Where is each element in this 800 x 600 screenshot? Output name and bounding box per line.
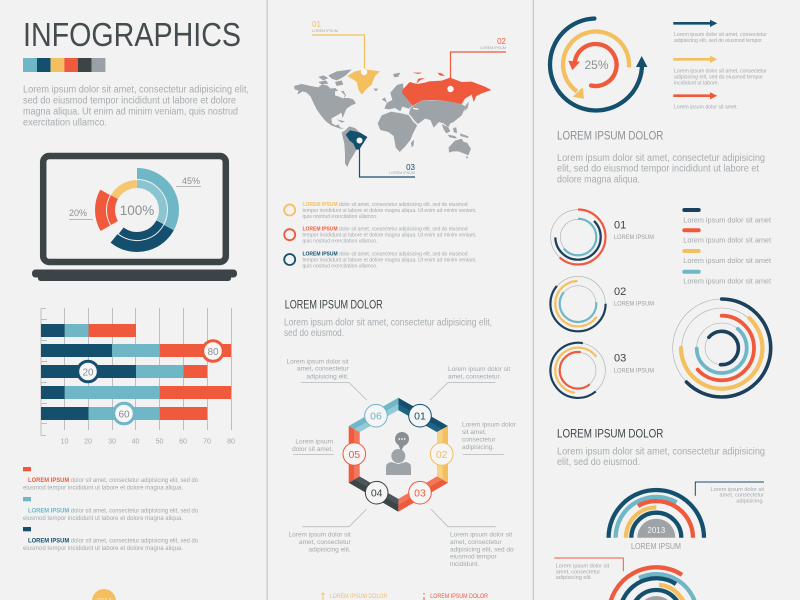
bar row 1 xyxy=(41,324,136,337)
red arrow xyxy=(568,44,617,86)
western hemisphere land xyxy=(294,69,378,167)
marker and callout 02: LOREM IPSUM xyxy=(480,46,506,50)
legend item navy: eiusmod tempor incididunt ut labore et dolore magna aliqua. xyxy=(23,545,183,552)
cut-off yellow year badge xyxy=(92,589,116,600)
colour legend: Lorem ipsum dolor sit amet xyxy=(683,236,771,245)
callout navy: adipisicing. xyxy=(736,499,764,505)
donut labels: 20% xyxy=(69,208,87,218)
callout red: amet, consectetur xyxy=(556,569,600,575)
node 05: 05 xyxy=(348,449,360,461)
Brazil highlighted xyxy=(346,130,367,149)
colour legend xyxy=(682,208,771,286)
callout 06: Lorem ipsum dolor sit xyxy=(287,358,349,365)
callout 04: amet, consectetur xyxy=(299,539,352,546)
colour palette swatches xyxy=(23,58,105,72)
navy arrow xyxy=(550,18,648,110)
callout 04: Lorem ipsum dolor sit xyxy=(289,531,351,538)
footer label red: LOREM IPSUM DOLOR xyxy=(430,594,489,600)
legend item red xyxy=(23,467,198,492)
legend item blue xyxy=(23,497,198,522)
bar row 2 xyxy=(41,344,231,357)
legend item navy: LOREM IPSUM dolor sit amet, consectetur adipisicing elit, sed do xyxy=(28,538,198,545)
axes and gridlines xyxy=(41,308,232,436)
callout red: adipisicing elit. xyxy=(556,575,593,581)
callout 03 xyxy=(431,509,514,568)
Greenland highlighted xyxy=(347,69,380,95)
intro text block xyxy=(23,84,249,128)
node 04: 04 xyxy=(371,488,383,500)
callout 05: Lorem ipsum xyxy=(295,438,333,445)
value marker 80: 80 xyxy=(207,347,219,358)
middle section text: sed do eiusmod. xyxy=(284,328,344,339)
callout navy: Lorem ipsum dolor sit xyxy=(711,487,764,493)
x axis labels: 20 xyxy=(84,438,92,446)
donut labels: 45% xyxy=(182,176,200,186)
bar row 4 xyxy=(41,386,231,399)
colour legend: Lorem ipsum dolor sit amet xyxy=(683,277,771,286)
hexagon cycle diagram xyxy=(287,358,517,568)
ring label 02: 02 xyxy=(614,286,626,298)
marker and callout 02: 02 xyxy=(497,37,507,46)
list item navy: quis nostrud exercitation ullamco. xyxy=(302,263,378,269)
list item navy: LOREM IPSUM dolor sit amet, consectetur adipisicing elit, sed do eiusmod xyxy=(302,251,468,257)
arrow yellow: adipisicing elit, sed do eiusmod tempor xyxy=(674,74,763,80)
callout 05 xyxy=(292,438,334,454)
hexagon ribbon segments xyxy=(349,398,448,512)
footer label yellow: LOREM IPSUM DOLOR xyxy=(330,594,388,600)
callout 01 xyxy=(430,366,510,400)
x axis labels: 70 xyxy=(203,438,211,446)
ring label 03: LOREM IPSUM xyxy=(614,367,654,374)
node 06: 06 xyxy=(370,410,382,422)
semicircle chart 2013 xyxy=(609,490,704,551)
callout 03: amet, consectetur xyxy=(450,539,502,546)
node 01: 01 xyxy=(414,410,426,422)
marker and callout 01 xyxy=(312,20,367,75)
intro text block: exercitation ullamco. xyxy=(23,118,107,128)
callout 04 xyxy=(289,509,367,553)
x axis labels xyxy=(61,438,235,446)
callout 01: amet, consectetur. xyxy=(448,373,501,380)
legend item blue: LOREM IPSUM dolor sit amet, consectetur adipisicing elit, sed do xyxy=(28,508,198,514)
right top section text: dolore magna aliqua. xyxy=(557,174,640,186)
callout 03: adipisicing elit, sed do xyxy=(450,546,514,553)
x axis labels: 60 xyxy=(179,438,187,446)
callout 05: dolor sit amet. xyxy=(292,446,333,453)
ring label 02 xyxy=(614,286,654,308)
callout 06: adipisicing elit. xyxy=(306,373,349,380)
title: INFOGRAPHICS xyxy=(23,16,241,53)
callout 02: sit amet, xyxy=(462,429,487,436)
arrow navy: adipisicing elit, sed do eiusmod tempor. xyxy=(674,38,763,44)
list item yellow: quis nostrud exercitation ullamco. xyxy=(302,214,378,220)
right top section text xyxy=(557,153,765,186)
marker and callout 03: LOREM IPSUM xyxy=(389,171,415,175)
icon: person with speech bubble xyxy=(386,432,411,475)
arrow navy xyxy=(673,20,767,44)
list item red: tempor incididunt ut labore et dolore magna aliqua. Ut enim ad minim veniam, xyxy=(302,233,477,239)
callout 06 xyxy=(287,358,367,400)
marker and callout 03 xyxy=(355,136,416,177)
callout red: Lorem ipsum dolor sit xyxy=(556,563,610,569)
heading: right top section: LOREM IPSUM DOLOR xyxy=(557,128,664,142)
middle section text xyxy=(284,318,492,339)
node 04 xyxy=(365,481,388,504)
laptop with donut chart xyxy=(32,156,237,281)
marker and callout 01: LOREM IPSUM xyxy=(312,29,338,33)
list item red xyxy=(284,227,477,245)
ring label 01: 01 xyxy=(614,220,626,232)
ring label 01: LOREM IPSUM xyxy=(614,234,654,241)
semicircle chart cut off xyxy=(609,567,697,600)
value marker 80 xyxy=(203,341,223,361)
right bottom section text xyxy=(557,446,765,468)
callout navy xyxy=(695,482,764,505)
Russia highlighted xyxy=(402,73,491,106)
legend item red: eiusmod tempor incididunt ut labore et dolore magna aliqua. xyxy=(23,484,183,492)
callout 02: adipisicing. xyxy=(462,444,494,451)
list item navy: tempor incididunt ut labore et dolore magna aliqua. Ut enim ad minim veniam, xyxy=(302,257,477,263)
callout 02: Lorem ipsum dolor xyxy=(462,422,517,429)
marker and callout 03: 03 xyxy=(406,163,416,172)
node 03: 03 xyxy=(414,488,426,500)
colour legend: Lorem ipsum dolor sit amet xyxy=(683,215,771,224)
node 02 xyxy=(430,443,453,465)
legend item navy xyxy=(23,527,198,552)
semicircle chart 2013: 2013 xyxy=(647,526,666,535)
legend item red: LOREM IPSUM dolor sit amet, consectetur adipisicing elit, sed do xyxy=(28,477,198,484)
intro text block: Lorem ipsum dolor sit amet, consectetur adipisicing elit, xyxy=(23,84,249,96)
ring label 01 xyxy=(614,220,654,241)
value marker 20 xyxy=(78,361,98,382)
node 02: 02 xyxy=(436,449,448,461)
x axis labels: 80 xyxy=(227,438,235,446)
x axis labels: 30 xyxy=(108,438,116,446)
value marker 60: 60 xyxy=(118,410,130,420)
donut labels: 100% xyxy=(120,203,154,218)
right bottom section text: elit, sed do eiusmod. xyxy=(557,457,640,468)
node 06 xyxy=(365,404,387,427)
callout navy: amet, consectetur xyxy=(720,493,764,499)
marker and callout 02 xyxy=(447,37,507,92)
arrow list xyxy=(673,20,767,111)
value marker 60 xyxy=(114,403,134,424)
callout 04: adipisicing elit. xyxy=(308,546,351,553)
legend item blue: eiusmod tempor incididunt ut labore et dolore magna aliqua. xyxy=(23,515,183,522)
large concentric ring chart xyxy=(664,290,779,406)
callout 03: incididunt. xyxy=(450,561,479,568)
heading: right bottom section: LOREM IPSUM DOLOR xyxy=(557,426,664,440)
node 03 xyxy=(409,481,431,504)
marker and callout 01: 01 xyxy=(312,20,321,29)
callout 03: eiusmod tempor xyxy=(450,554,497,561)
ring label 02: LOREM IPSUM xyxy=(614,300,654,308)
node 01 xyxy=(409,404,431,427)
intro text block: magna aliqua. Ut enim ad minim veniam, quis nostrud xyxy=(23,106,238,118)
arrow red: Lorem ipsum dolor sit amet. xyxy=(674,105,738,111)
list item yellow: LOREM IPSUM dolor sit amet, consectetur adipisicing elit, sed do eiusmod xyxy=(302,202,468,208)
yellow arrow xyxy=(563,32,629,99)
heading: middle section: LOREM IPSUM DOLOR xyxy=(285,297,383,311)
arrow navy: Lorem ipsum dolor sit amet, consectetur xyxy=(674,32,767,38)
ring chart 02 xyxy=(546,272,610,335)
ring chart 01 xyxy=(546,205,610,269)
world map xyxy=(294,20,507,177)
callout 01: Lorem ipsum dolor sit xyxy=(448,366,510,373)
donut chart xyxy=(87,160,187,260)
25 percent label: 25% xyxy=(584,58,609,72)
list item red: quis nostrud exercitation ullamco. xyxy=(302,239,378,245)
laptop body xyxy=(32,156,237,281)
callout 02 xyxy=(462,422,517,454)
bar row 3 xyxy=(41,365,207,378)
callout 03: Lorem ipsum dolor sit xyxy=(450,531,512,538)
ring label 03: 03 xyxy=(614,353,626,365)
donut labels xyxy=(69,176,201,220)
callout red xyxy=(554,558,623,581)
ring label 03 xyxy=(614,353,654,374)
eastern hemisphere land xyxy=(378,73,471,158)
arrow yellow xyxy=(673,56,767,86)
stacked bar chart xyxy=(41,308,235,446)
x axis labels: 10 xyxy=(61,438,68,446)
bar chart legend xyxy=(23,467,198,552)
value marker 20: 20 xyxy=(82,368,94,378)
right top section text: Lorem ipsum dolor sit amet, consectetur adipisicing xyxy=(557,153,765,164)
right top section text: elit, sed do eiusmod tempor incididunt ut labore et xyxy=(557,164,759,175)
list item yellow: tempor incididunt ut labore et dolore magna aliqua. Ut enim ad minim veniam, xyxy=(302,208,477,214)
colour legend: Lorem ipsum dolor sit amet xyxy=(683,256,771,265)
right bottom section text: Lorem ipsum dolor sit amet, consectetur adipisicing xyxy=(557,446,765,458)
list item navy xyxy=(284,251,477,269)
arrow yellow: Lorem ipsum dolor sit amet, consectetur xyxy=(674,69,767,75)
middle section text: Lorem ipsum dolor sit amet, consectetur adipisicing elit, xyxy=(284,318,492,328)
semicircle chart 2013: LOREM IPSUM xyxy=(631,541,681,551)
intro text block: sed do eiusmod tempor incididunt ut labore et dolore xyxy=(23,96,236,106)
x axis labels: 50 xyxy=(156,438,163,446)
map legend list xyxy=(284,202,477,269)
footer label yellow xyxy=(322,593,388,600)
node 05 xyxy=(343,443,366,465)
arrow yellow: incididunt ut labore. xyxy=(674,80,719,86)
circular arrows chart xyxy=(550,18,648,110)
list item yellow xyxy=(284,202,477,220)
list item red: LOREM IPSUM dolor sit amet, consectetur adipisicing elit, sed do eiusmod xyxy=(302,227,468,233)
x axis labels: 40 xyxy=(132,438,139,446)
bar row 5 xyxy=(41,407,207,420)
inland water gaps xyxy=(335,90,418,125)
callout 06: amet, consectetur xyxy=(297,366,350,373)
callout 02: consectetur xyxy=(462,437,496,444)
ring chart 03 xyxy=(539,331,617,409)
